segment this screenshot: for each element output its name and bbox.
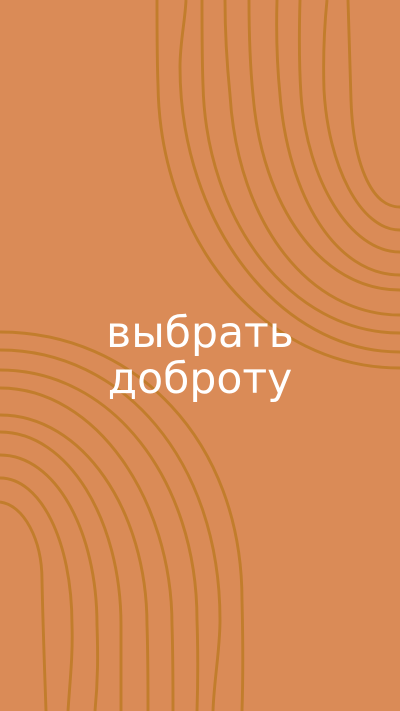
title: доброту	[108, 355, 292, 404]
title: выбрать	[106, 309, 294, 358]
title	[106, 309, 294, 404]
top-right concentric arches	[157, 0, 400, 368]
bottom-left concentric arches	[0, 332, 243, 711]
